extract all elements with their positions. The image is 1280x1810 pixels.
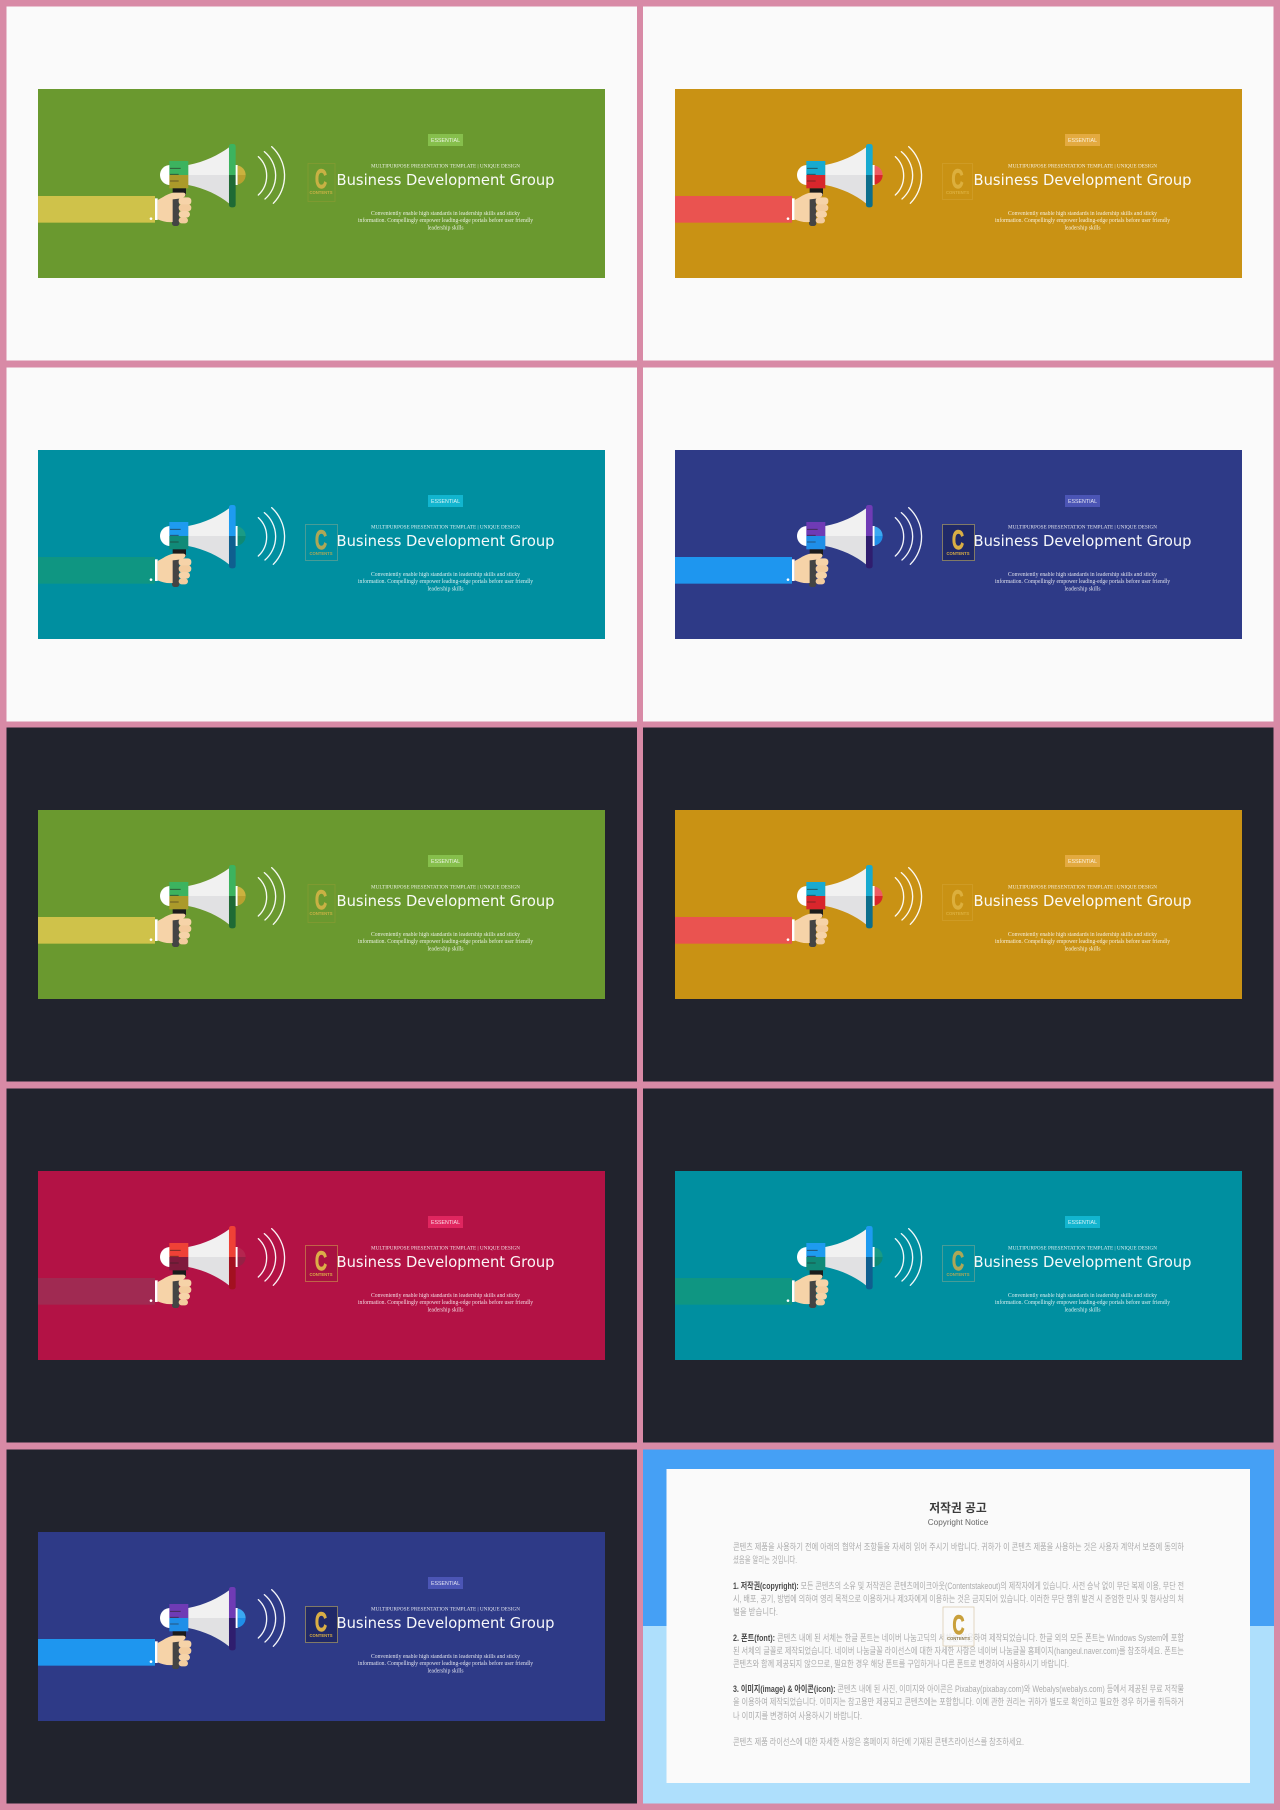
logo watermark: CONTENTS (947, 1636, 970, 1641)
description: leadership skills (1064, 586, 1101, 592)
logo: CONTENTS (309, 551, 333, 556)
logo: CONTENTS (946, 190, 969, 195)
panel: green slide on light background (6, 6, 637, 360)
badge: ESSENTIAL (431, 1581, 460, 1587)
slide background (643, 6, 1274, 360)
paragraph: images and icons: 나 이미지를 변경하여 사용하시기 바랍니다. (733, 1710, 862, 1721)
logo: C (952, 1246, 964, 1276)
panel: copyright notice (643, 1450, 1274, 1804)
paragraph: images and icons: 3. 이미지(image) & 아이콘(icon): 콘텐츠 내에 된 사진, 이미지와 아이콘은 Pixabay(pixabay.com)와 Webalys(webalys.com) 등에서 제공된 무료 저작물 (733, 1683, 1184, 1694)
description: information. Compellingly empower leading-edge portals before user friendly (995, 938, 1170, 945)
paragraph: font: 2. 폰트(font): 콘텐츠 내에 된 서체는 한글 폰트는 네이버 나눔고딕의 서체를 이용하여 제작되었습니다. 한글 외의 모든 폰트는 Windows System에 포함 (733, 1632, 1184, 1643)
icon: hand with megaphone (38, 1587, 285, 1669)
banner (38, 1532, 605, 1721)
banner (675, 89, 1242, 278)
intro paragraph (733, 1541, 1185, 1565)
logo (942, 884, 972, 920)
panel: amber slide on light background (643, 6, 1274, 360)
logo: C (315, 1246, 327, 1276)
logo (308, 884, 335, 922)
description: leadership skills (428, 226, 464, 232)
badge (1065, 855, 1100, 867)
light blue lower background (643, 1626, 1274, 1804)
description: Conveniently enable high standards in leadership skills and sticky (1008, 572, 1157, 578)
slide background (6, 1450, 637, 1804)
logo (306, 1606, 338, 1642)
logo: C (315, 1607, 327, 1637)
subheading: Copyright Notice (928, 1518, 989, 1527)
description: Conveniently enable high standards in leadership skills and sticky (371, 572, 520, 578)
logo (306, 524, 338, 560)
title: Business Development Group (336, 892, 554, 910)
logo: C (315, 525, 327, 555)
title: Business Development Group (974, 1253, 1192, 1271)
badge: ESSENTIAL (1068, 859, 1097, 865)
description: Conveniently enable high standards in leadership skills and sticky (371, 1293, 520, 1299)
subtitle: MULTIPURPOSE PRESENTATION TEMPLATE | UNIQUE DESIGN (371, 164, 520, 170)
logo: CONTENTS (309, 190, 333, 195)
blue upper background (643, 1450, 1274, 1626)
panel: crimson slide on dark background (6, 1088, 637, 1442)
description: Conveniently enable high standards in leadership skills and sticky (1008, 932, 1157, 938)
description: leadership skills (1064, 1308, 1101, 1314)
logo: C (315, 164, 327, 194)
title: Business Development Group (336, 171, 554, 189)
icon: hand with megaphone (38, 1226, 285, 1308)
description: leadership skills (428, 1668, 464, 1674)
banner (38, 810, 605, 999)
paragraph: font (733, 1632, 1184, 1669)
icon: hand with megaphone (38, 865, 285, 947)
logo: C (952, 885, 964, 915)
badge: ESSENTIAL (1068, 1220, 1097, 1226)
badge (428, 134, 463, 146)
banner (675, 450, 1242, 639)
intro paragraph: 셨음을 알리는 것입니다. (733, 1554, 797, 1565)
panel: teal slide on light background (6, 368, 637, 722)
banner (38, 89, 605, 278)
subtitle: MULTIPURPOSE PRESENTATION TEMPLATE | UNIQUE DESIGN (1008, 524, 1157, 530)
description: information. Compellingly empower leading-edge portals before user friendly (995, 1299, 1170, 1306)
paragraph: copyright (733, 1580, 1184, 1617)
description (358, 1293, 533, 1314)
badge: ESSENTIAL (431, 138, 460, 144)
description (995, 572, 1170, 592)
banner (38, 1171, 605, 1360)
slide background (6, 368, 637, 722)
title: Business Development Group (974, 532, 1192, 550)
logo (306, 1246, 338, 1282)
badge: ESSENTIAL (431, 499, 460, 505)
logo (308, 164, 335, 202)
panel: teal slide on dark background (643, 1088, 1274, 1442)
logo (942, 1246, 974, 1282)
badge: ESSENTIAL (431, 859, 460, 865)
icon: hand with megaphone (675, 865, 922, 947)
subtitle: MULTIPURPOSE PRESENTATION TEMPLATE | UNIQUE DESIGN (1008, 884, 1157, 890)
subtitle: MULTIPURPOSE PRESENTATION TEMPLATE | UNIQUE DESIGN (371, 1246, 520, 1252)
description (995, 932, 1170, 952)
icon: hand with megaphone (675, 1226, 922, 1308)
icon: hand with megaphone (38, 144, 285, 226)
logo: CONTENTS (946, 551, 970, 556)
description: leadership skills (428, 1308, 464, 1314)
title: Business Development Group (336, 1614, 554, 1632)
badge (428, 1216, 463, 1228)
logo: C (952, 525, 964, 555)
description: Conveniently enable high standards in leadership skills and sticky (371, 932, 520, 938)
description (995, 211, 1170, 232)
description: information. Compellingly empower leading-edge portals before user friendly (358, 578, 533, 585)
description (995, 1293, 1170, 1314)
description: Conveniently enable high standards in leadership skills and sticky (371, 211, 520, 217)
description: leadership skills (428, 946, 464, 952)
description: Conveniently enable high standards in leadership skills and sticky (1008, 211, 1157, 217)
slide background (6, 6, 637, 360)
logo: CONTENTS (309, 1272, 333, 1277)
closing line: 콘텐츠 제품 라이선스에 대한 자세한 사항은 홈페이지 하단에 기재된 콘텐츠라이선스를 참조하세요. (733, 1736, 1024, 1747)
subtitle: MULTIPURPOSE PRESENTATION TEMPLATE | UNIQUE DESIGN (1008, 1246, 1157, 1252)
title: Business Development Group (336, 532, 554, 550)
logo watermark (943, 1607, 974, 1646)
heading: 저작권 공고 (929, 1501, 987, 1515)
panel: amber slide on dark background (643, 728, 1274, 1082)
description: information. Compellingly empower leading-edge portals before user friendly (358, 1299, 533, 1306)
panel: navy slide on dark background (6, 1450, 637, 1804)
badge: ESSENTIAL (1068, 138, 1097, 144)
subtitle: MULTIPURPOSE PRESENTATION TEMPLATE | UNIQUE DESIGN (1008, 164, 1157, 170)
logo: CONTENTS (946, 911, 969, 916)
title: Business Development Group (974, 171, 1192, 189)
subtitle: MULTIPURPOSE PRESENTATION TEMPLATE | UNIQUE DESIGN (371, 524, 520, 530)
description: information. Compellingly empower leading-edge portals before user friendly (995, 578, 1170, 585)
badge (1065, 1216, 1100, 1228)
title: Business Development Group (974, 892, 1192, 910)
badge (428, 495, 463, 507)
description: Conveniently enable high standards in leadership skills and sticky (371, 1654, 520, 1660)
logo (942, 164, 972, 200)
badge: ESSENTIAL (431, 1220, 460, 1226)
paragraph: images and icons (733, 1683, 1184, 1721)
badge (428, 1577, 463, 1589)
slide background (6, 1088, 637, 1442)
logo: C (315, 885, 327, 915)
logo: CONTENTS (309, 911, 333, 916)
icon: hand with megaphone (675, 144, 922, 226)
description (358, 211, 533, 232)
logo watermark: C (952, 1610, 964, 1640)
slide background (6, 728, 637, 1082)
description: leadership skills (428, 586, 464, 592)
paragraph: font: 콘텐츠와 함께 제공되지 않으므로, 필요한 경우 해당 폰트를 구입하거나 다른 폰트로 변경하여 사용하시기 바랍니다. (733, 1658, 1069, 1669)
banner (38, 450, 605, 639)
badge (1065, 134, 1100, 146)
icon: hand with megaphone (675, 505, 922, 587)
description: leadership skills (1064, 946, 1101, 952)
paragraph: copyright: 1. 저작권(copyright): 모든 콘텐츠의 소유 및 저작권은 콘텐츠메이크아웃(Contentstakeout)의 제작자에게 있습니다. 사전 승낙 없이 무단 복제 이용, 무단 전 (733, 1580, 1184, 1591)
badge (1065, 495, 1100, 507)
panel: navy slide on light background (643, 368, 1274, 722)
description (358, 1654, 533, 1674)
logo: CONTENTS (309, 1633, 333, 1638)
badge (428, 855, 463, 867)
logo: C (952, 164, 964, 194)
description (358, 572, 533, 592)
logo: CONTENTS (946, 1272, 970, 1277)
subtitle: MULTIPURPOSE PRESENTATION TEMPLATE | UNIQUE DESIGN (371, 1606, 520, 1612)
title: Business Development Group (336, 1253, 554, 1271)
white card (666, 1469, 1250, 1783)
description (358, 932, 533, 952)
description: Conveniently enable high standards in leadership skills and sticky (1008, 1293, 1157, 1299)
description: information. Compellingly empower leading-edge portals before user friendly (358, 1660, 533, 1667)
paragraph: copyright: 벌을 받습니다. (733, 1607, 778, 1617)
description: information. Compellingly empower leading-edge portals before user friendly (358, 938, 533, 945)
slide background (643, 728, 1274, 1082)
description: information. Compellingly empower leading-edge portals before user friendly (995, 217, 1170, 224)
slide background (643, 1088, 1274, 1442)
badge: ESSENTIAL (1068, 499, 1097, 505)
banner (675, 1171, 1242, 1360)
slide background (643, 368, 1274, 722)
description: leadership skills (1064, 226, 1101, 232)
banner (675, 810, 1242, 999)
logo (942, 524, 974, 560)
icon: hand with megaphone (38, 505, 285, 587)
panel: green slide on dark background (6, 728, 637, 1082)
description: information. Compellingly empower leading-edge portals before user friendly (358, 217, 533, 224)
subtitle: MULTIPURPOSE PRESENTATION TEMPLATE | UNIQUE DESIGN (371, 884, 520, 890)
